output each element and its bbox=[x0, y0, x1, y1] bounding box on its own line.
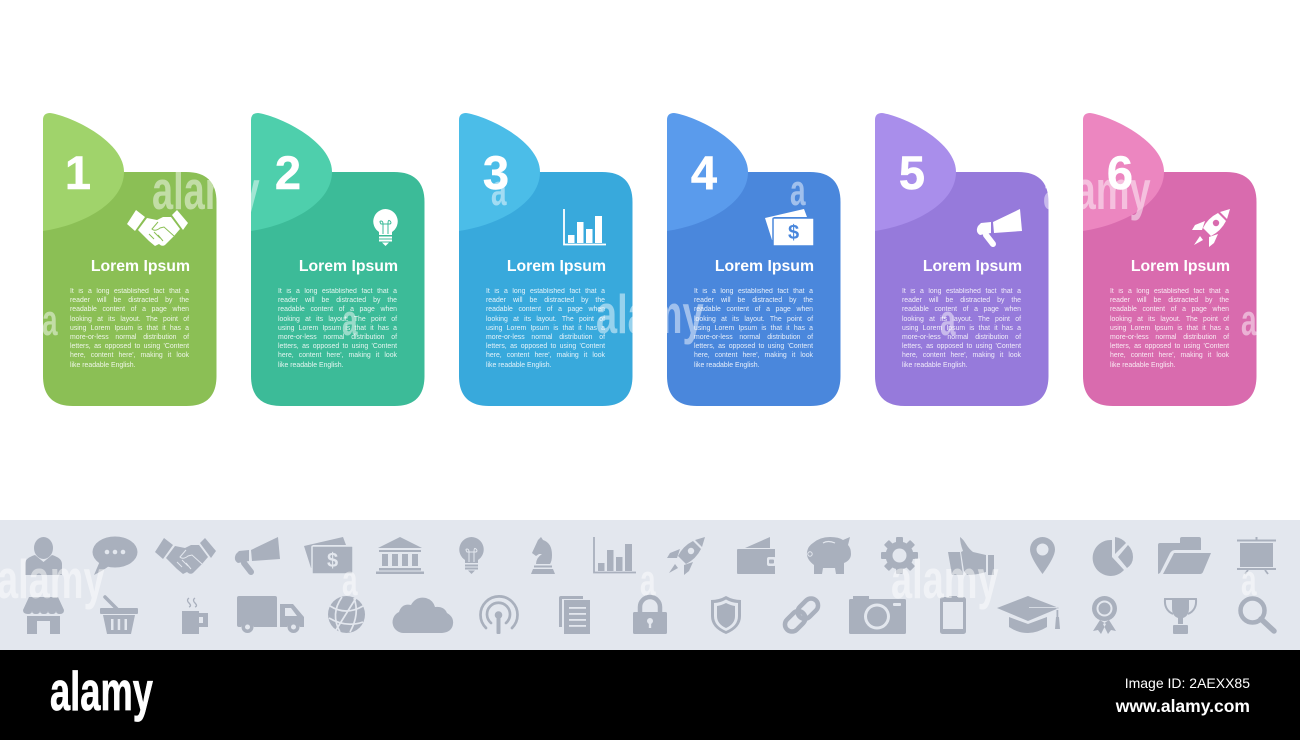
number 5: 5 bbox=[899, 146, 925, 199]
heading 5: Lorem Ipsum bbox=[923, 258, 1022, 274]
body text 6: reader will be distracted by the bbox=[1110, 297, 1229, 304]
body text 2: readable content of a page when bbox=[278, 306, 397, 313]
card 1 shape and icon bbox=[43, 113, 216, 406]
card 3: sky blue bbox=[459, 113, 632, 406]
body text 2 bbox=[278, 288, 398, 368]
body text 3: like readable English. bbox=[486, 362, 552, 368]
body text 2: reader will be distracted by the bbox=[278, 297, 397, 304]
body text 6 bbox=[1110, 288, 1230, 368]
body text 2: like readable English. bbox=[278, 362, 344, 368]
body text 6: readable content of a page when bbox=[1110, 306, 1229, 313]
body text 1: looking at its layout. The point of bbox=[70, 316, 189, 323]
body text 1: like readable English. bbox=[70, 362, 136, 368]
website: www.alamy.com bbox=[1116, 696, 1250, 716]
body text 2: more-or-less normal distribution of bbox=[278, 334, 397, 341]
heading 6: Lorem Ipsum bbox=[1131, 258, 1230, 274]
body text 3: looking at its layout. The point of bbox=[486, 316, 605, 323]
body text 3: reader will be distracted by the bbox=[486, 297, 605, 304]
body text 1: It is a long established fact that a bbox=[70, 288, 189, 295]
body text 6: looking at its layout. The point of bbox=[1110, 316, 1229, 323]
heading 2: Lorem Ipsum bbox=[299, 258, 398, 274]
body text 5: more-or-less normal distribution of bbox=[902, 334, 1021, 341]
card 6 shape and icon bbox=[1083, 113, 1256, 406]
watermark overlay: alamy bbox=[152, 159, 260, 221]
body text 4: using Lorem Ipsum is that it has a bbox=[694, 325, 813, 332]
body text 2: looking at its layout. The point of bbox=[278, 316, 397, 323]
body text 3 bbox=[486, 288, 606, 368]
body text 5: readable content of a page when bbox=[902, 306, 1021, 313]
watermark overlay: alamy bbox=[1043, 159, 1151, 221]
watermark overlay: a bbox=[42, 296, 58, 345]
body text 4: readable content of a page when bbox=[694, 306, 813, 313]
card 5 shape and icon bbox=[875, 113, 1048, 406]
heading 4: Lorem Ipsum bbox=[715, 258, 814, 274]
body text 5: like readable English. bbox=[902, 362, 968, 368]
body text 4: reader will be distracted by the bbox=[694, 297, 813, 304]
number 3: 3 bbox=[483, 146, 509, 199]
body text 4: looking at its layout. The point of bbox=[694, 316, 813, 323]
body text 5: letters, as opposed to using 'Content bbox=[902, 343, 1021, 350]
body text 3: here, content here', making it look bbox=[486, 352, 605, 359]
body text 3: using Lorem Ipsum is that it has a bbox=[486, 325, 605, 332]
watermark overlay: alamy bbox=[596, 283, 704, 345]
body text 6: here, content here', making it look bbox=[1110, 352, 1229, 359]
watermark overlay: alamy bbox=[0, 548, 105, 610]
body text 4: It is a long established fact that a bbox=[694, 288, 813, 295]
number 2: 2 bbox=[275, 146, 301, 199]
body text 6: It is a long established fact that a bbox=[1110, 288, 1229, 295]
body text 6: letters, as opposed to using 'Content bbox=[1110, 343, 1229, 350]
body text 1: here, content here', making it look bbox=[70, 352, 189, 359]
body text 3: more-or-less normal distribution of bbox=[486, 334, 605, 341]
card 4 shape and icon bbox=[667, 113, 840, 406]
body text 4 bbox=[694, 288, 814, 368]
body text 5: reader will be distracted by the bbox=[902, 297, 1021, 304]
body text 1: letters, as opposed to using 'Content bbox=[70, 343, 189, 350]
body text 6: like readable English. bbox=[1110, 362, 1176, 368]
body text 5: looking at its layout. The point of bbox=[902, 316, 1021, 323]
watermark overlay: a bbox=[1241, 556, 1257, 605]
body text 5: using Lorem Ipsum is that it has a bbox=[902, 325, 1021, 332]
body text 1: using Lorem Ipsum is that it has a bbox=[70, 325, 189, 332]
body text 2: It is a long established fact that a bbox=[278, 288, 397, 295]
watermark overlay: a bbox=[491, 166, 507, 215]
heading 1: Lorem Ipsum bbox=[91, 258, 190, 274]
number 6: 6 bbox=[1107, 146, 1133, 199]
watermark overlay: a bbox=[790, 166, 806, 215]
body text 6: more-or-less normal distribution of bbox=[1110, 334, 1229, 341]
footer bar bbox=[0, 650, 1300, 740]
watermark overlay: a bbox=[342, 296, 358, 345]
body text 5 bbox=[902, 288, 1022, 368]
body text 3: It is a long established fact that a bbox=[486, 288, 605, 295]
body text 4: more-or-less normal distribution of bbox=[694, 334, 813, 341]
heading 3: Lorem Ipsum bbox=[507, 258, 606, 274]
number 4: 4 bbox=[691, 146, 717, 199]
body text 5: It is a long established fact that a bbox=[902, 288, 1021, 295]
body text 2: using Lorem Ipsum is that it has a bbox=[278, 325, 397, 332]
body text 2: here, content here', making it look bbox=[278, 352, 397, 359]
body text 4: here, content here', making it look bbox=[694, 352, 813, 359]
number 1: 1 bbox=[65, 146, 91, 199]
watermark overlay: alamy bbox=[891, 548, 999, 610]
card 3 shape and icon bbox=[459, 113, 632, 406]
body text 3: letters, as opposed to using 'Content bbox=[486, 343, 605, 350]
watermark overlay: a bbox=[640, 556, 656, 605]
card 2: teal bbox=[251, 113, 424, 406]
body text 1: readable content of a page when bbox=[70, 306, 189, 313]
watermark overlay: a bbox=[342, 556, 358, 605]
watermark overlay: a bbox=[940, 296, 956, 345]
card 5: purple bbox=[875, 113, 1048, 406]
body text 2: letters, as opposed to using 'Content bbox=[278, 343, 397, 350]
body text 3: readable content of a page when bbox=[486, 306, 605, 313]
body text 1: reader will be distracted by the bbox=[70, 297, 189, 304]
card 2 shape and icon bbox=[251, 113, 424, 406]
body text 4: like readable English. bbox=[694, 362, 760, 368]
body text 4: letters, as opposed to using 'Content bbox=[694, 343, 813, 350]
body text 1: more-or-less normal distribution of bbox=[70, 334, 189, 341]
watermark overlay: a bbox=[1241, 296, 1257, 345]
card 6: pink bbox=[1083, 113, 1256, 406]
icon strip panel bbox=[0, 520, 1300, 650]
body text 1 bbox=[70, 288, 190, 368]
body text 5: here, content here', making it look bbox=[902, 352, 1021, 359]
footer logo: alamy bbox=[50, 660, 153, 722]
body text 6: using Lorem Ipsum is that it has a bbox=[1110, 325, 1229, 332]
card 1: green bbox=[43, 113, 216, 406]
card 4: blue bbox=[667, 113, 840, 406]
image id: Image ID: 2AEXX85 bbox=[1125, 675, 1250, 691]
icon set bbox=[23, 536, 1277, 634]
